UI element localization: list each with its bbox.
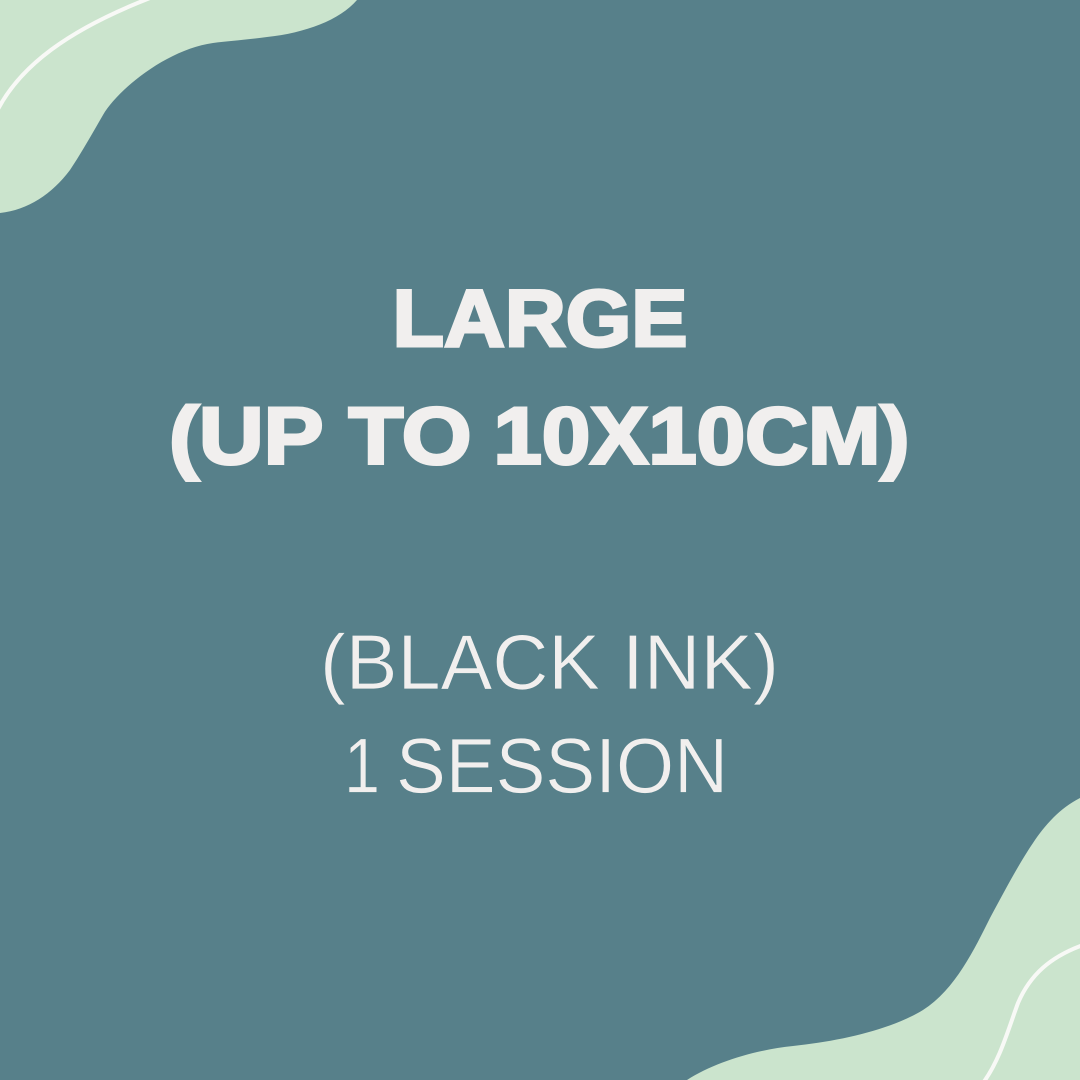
subtitle: (BLACK [320,618,600,706]
title: LARGE [392,274,688,364]
title [169,274,910,482]
title: TO [348,392,472,482]
subtitle [320,618,779,810]
decorative blob: top-left corner [0,0,357,213]
subtitle: INK) [622,618,779,706]
title: 10X10CM) [494,392,910,482]
title: (UP [169,392,324,482]
subtitle: 1 [344,722,380,810]
subtitle: SESSION [396,722,728,810]
decorative blob: bottom-right corner [687,798,1080,1080]
